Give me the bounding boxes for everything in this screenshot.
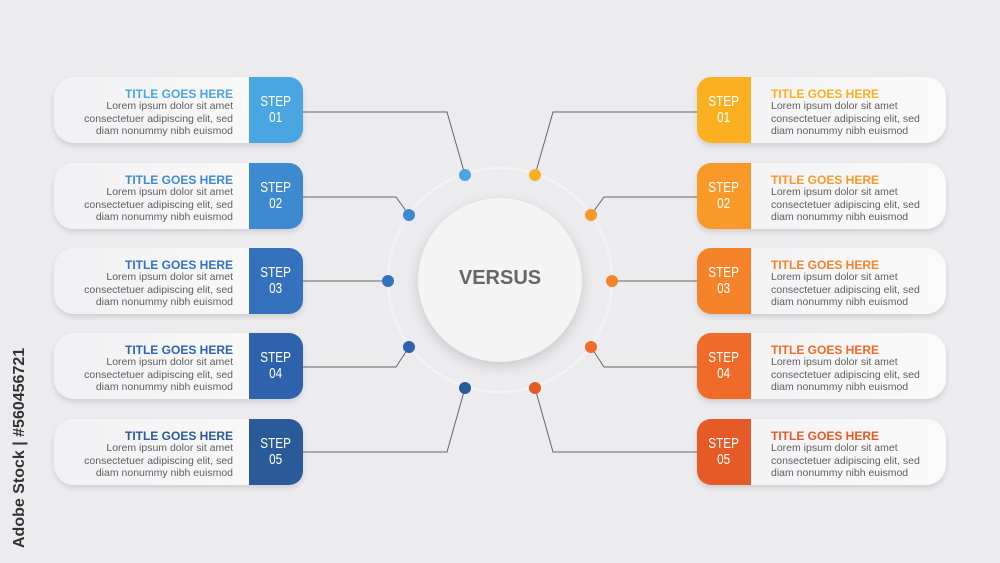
right card 03: 03 (717, 280, 731, 297)
left card 01 (54, 77, 303, 143)
left card 04: TITLE GOES HERE (125, 343, 233, 357)
right card 04: TITLE GOES HERE (771, 343, 879, 357)
right card 03: TITLE GOES HERE (771, 258, 879, 272)
right card 01: STEP (709, 93, 739, 110)
left card 03: TITLE GOES HERE (125, 258, 233, 272)
left card 04 (54, 333, 303, 399)
right card 05: consectetuer adipiscing elit, sed (771, 454, 920, 466)
left card 01: consectetuer adipiscing elit, sed (84, 112, 233, 124)
left card 01: 01 (269, 109, 283, 126)
right card 03: consectetuer adipiscing elit, sed (771, 284, 920, 296)
right card 04: diam nonummy nibh euismod (771, 381, 908, 393)
left card 05: diam nonummy nibh euismod (96, 467, 233, 479)
left card 04: 04 (269, 365, 283, 382)
right card 04: STEP (709, 349, 739, 366)
left card 01: STEP (261, 93, 291, 110)
left card 02: TITLE GOES HERE (125, 173, 233, 187)
right card 01: diam nonummy nibh euismod (771, 125, 908, 137)
right card 01 (697, 77, 946, 143)
left card 02: 02 (269, 195, 283, 212)
left card 02: Lorem ipsum dolor sit amet (106, 186, 233, 198)
left card 05 (54, 419, 303, 485)
right card 03: diam nonummy nibh euismod (771, 296, 908, 308)
left card 01: TITLE GOES HERE (125, 87, 233, 101)
right card 05: Lorem ipsum dolor sit amet (771, 442, 898, 454)
left card 03 (54, 248, 303, 314)
right card 01: 01 (717, 109, 731, 126)
right card 05: diam nonummy nibh euismod (771, 467, 908, 479)
left card 04: consectetuer adipiscing elit, sed (84, 368, 233, 380)
left card 01: Lorem ipsum dolor sit amet (106, 100, 233, 112)
left card 05: consectetuer adipiscing elit, sed (84, 454, 233, 466)
right card 05: 05 (717, 451, 731, 468)
left card 03: consectetuer adipiscing elit, sed (84, 284, 233, 296)
right card 02: 02 (717, 195, 731, 212)
right card 01: consectetuer adipiscing elit, sed (771, 112, 920, 124)
right card 03 (697, 248, 946, 314)
right card 02: TITLE GOES HERE (771, 173, 879, 187)
left card 04: Lorem ipsum dolor sit amet (106, 356, 233, 368)
right card 02: diam nonummy nibh euismod (771, 211, 908, 223)
right card 04: 04 (717, 365, 731, 382)
right card 02 (697, 163, 946, 229)
left card 03: diam nonummy nibh euismod (96, 296, 233, 308)
left card 03: STEP (261, 264, 291, 281)
left card 05: STEP (261, 435, 291, 452)
right card 04: consectetuer adipiscing elit, sed (771, 368, 920, 380)
right card 05 (697, 419, 946, 485)
right card 05: TITLE GOES HERE (771, 429, 879, 443)
left card 02: diam nonummy nibh euismod (96, 211, 233, 223)
watermark side text: Adobe Stock | #560456721 (11, 348, 28, 548)
left card 05: TITLE GOES HERE (125, 429, 233, 443)
right card 04 (697, 333, 946, 399)
right card 03: STEP (709, 264, 739, 281)
right card 01: TITLE GOES HERE (771, 87, 879, 101)
right card 02: consectetuer adipiscing elit, sed (771, 198, 920, 210)
left card 05: Lorem ipsum dolor sit amet (106, 442, 233, 454)
left card 02: consectetuer adipiscing elit, sed (84, 198, 233, 210)
right card 03: Lorem ipsum dolor sit amet (771, 271, 898, 283)
left card 04: STEP (261, 349, 291, 366)
center circle (418, 198, 582, 362)
left card 05: 05 (269, 451, 283, 468)
right card 01: Lorem ipsum dolor sit amet (771, 100, 898, 112)
left card 01: diam nonummy nibh euismod (96, 125, 233, 137)
left card 04: diam nonummy nibh euismod (96, 381, 233, 393)
left card 03: 03 (269, 280, 283, 297)
center circle: VERSUS (459, 267, 541, 289)
left card 02: STEP (261, 179, 291, 196)
left card 03: Lorem ipsum dolor sit amet (106, 271, 233, 283)
right card 02: STEP (709, 179, 739, 196)
right card 05: STEP (709, 435, 739, 452)
left card 02 (54, 163, 303, 229)
right card 02: Lorem ipsum dolor sit amet (771, 186, 898, 198)
dots (382, 169, 618, 394)
right card 04: Lorem ipsum dolor sit amet (771, 356, 898, 368)
